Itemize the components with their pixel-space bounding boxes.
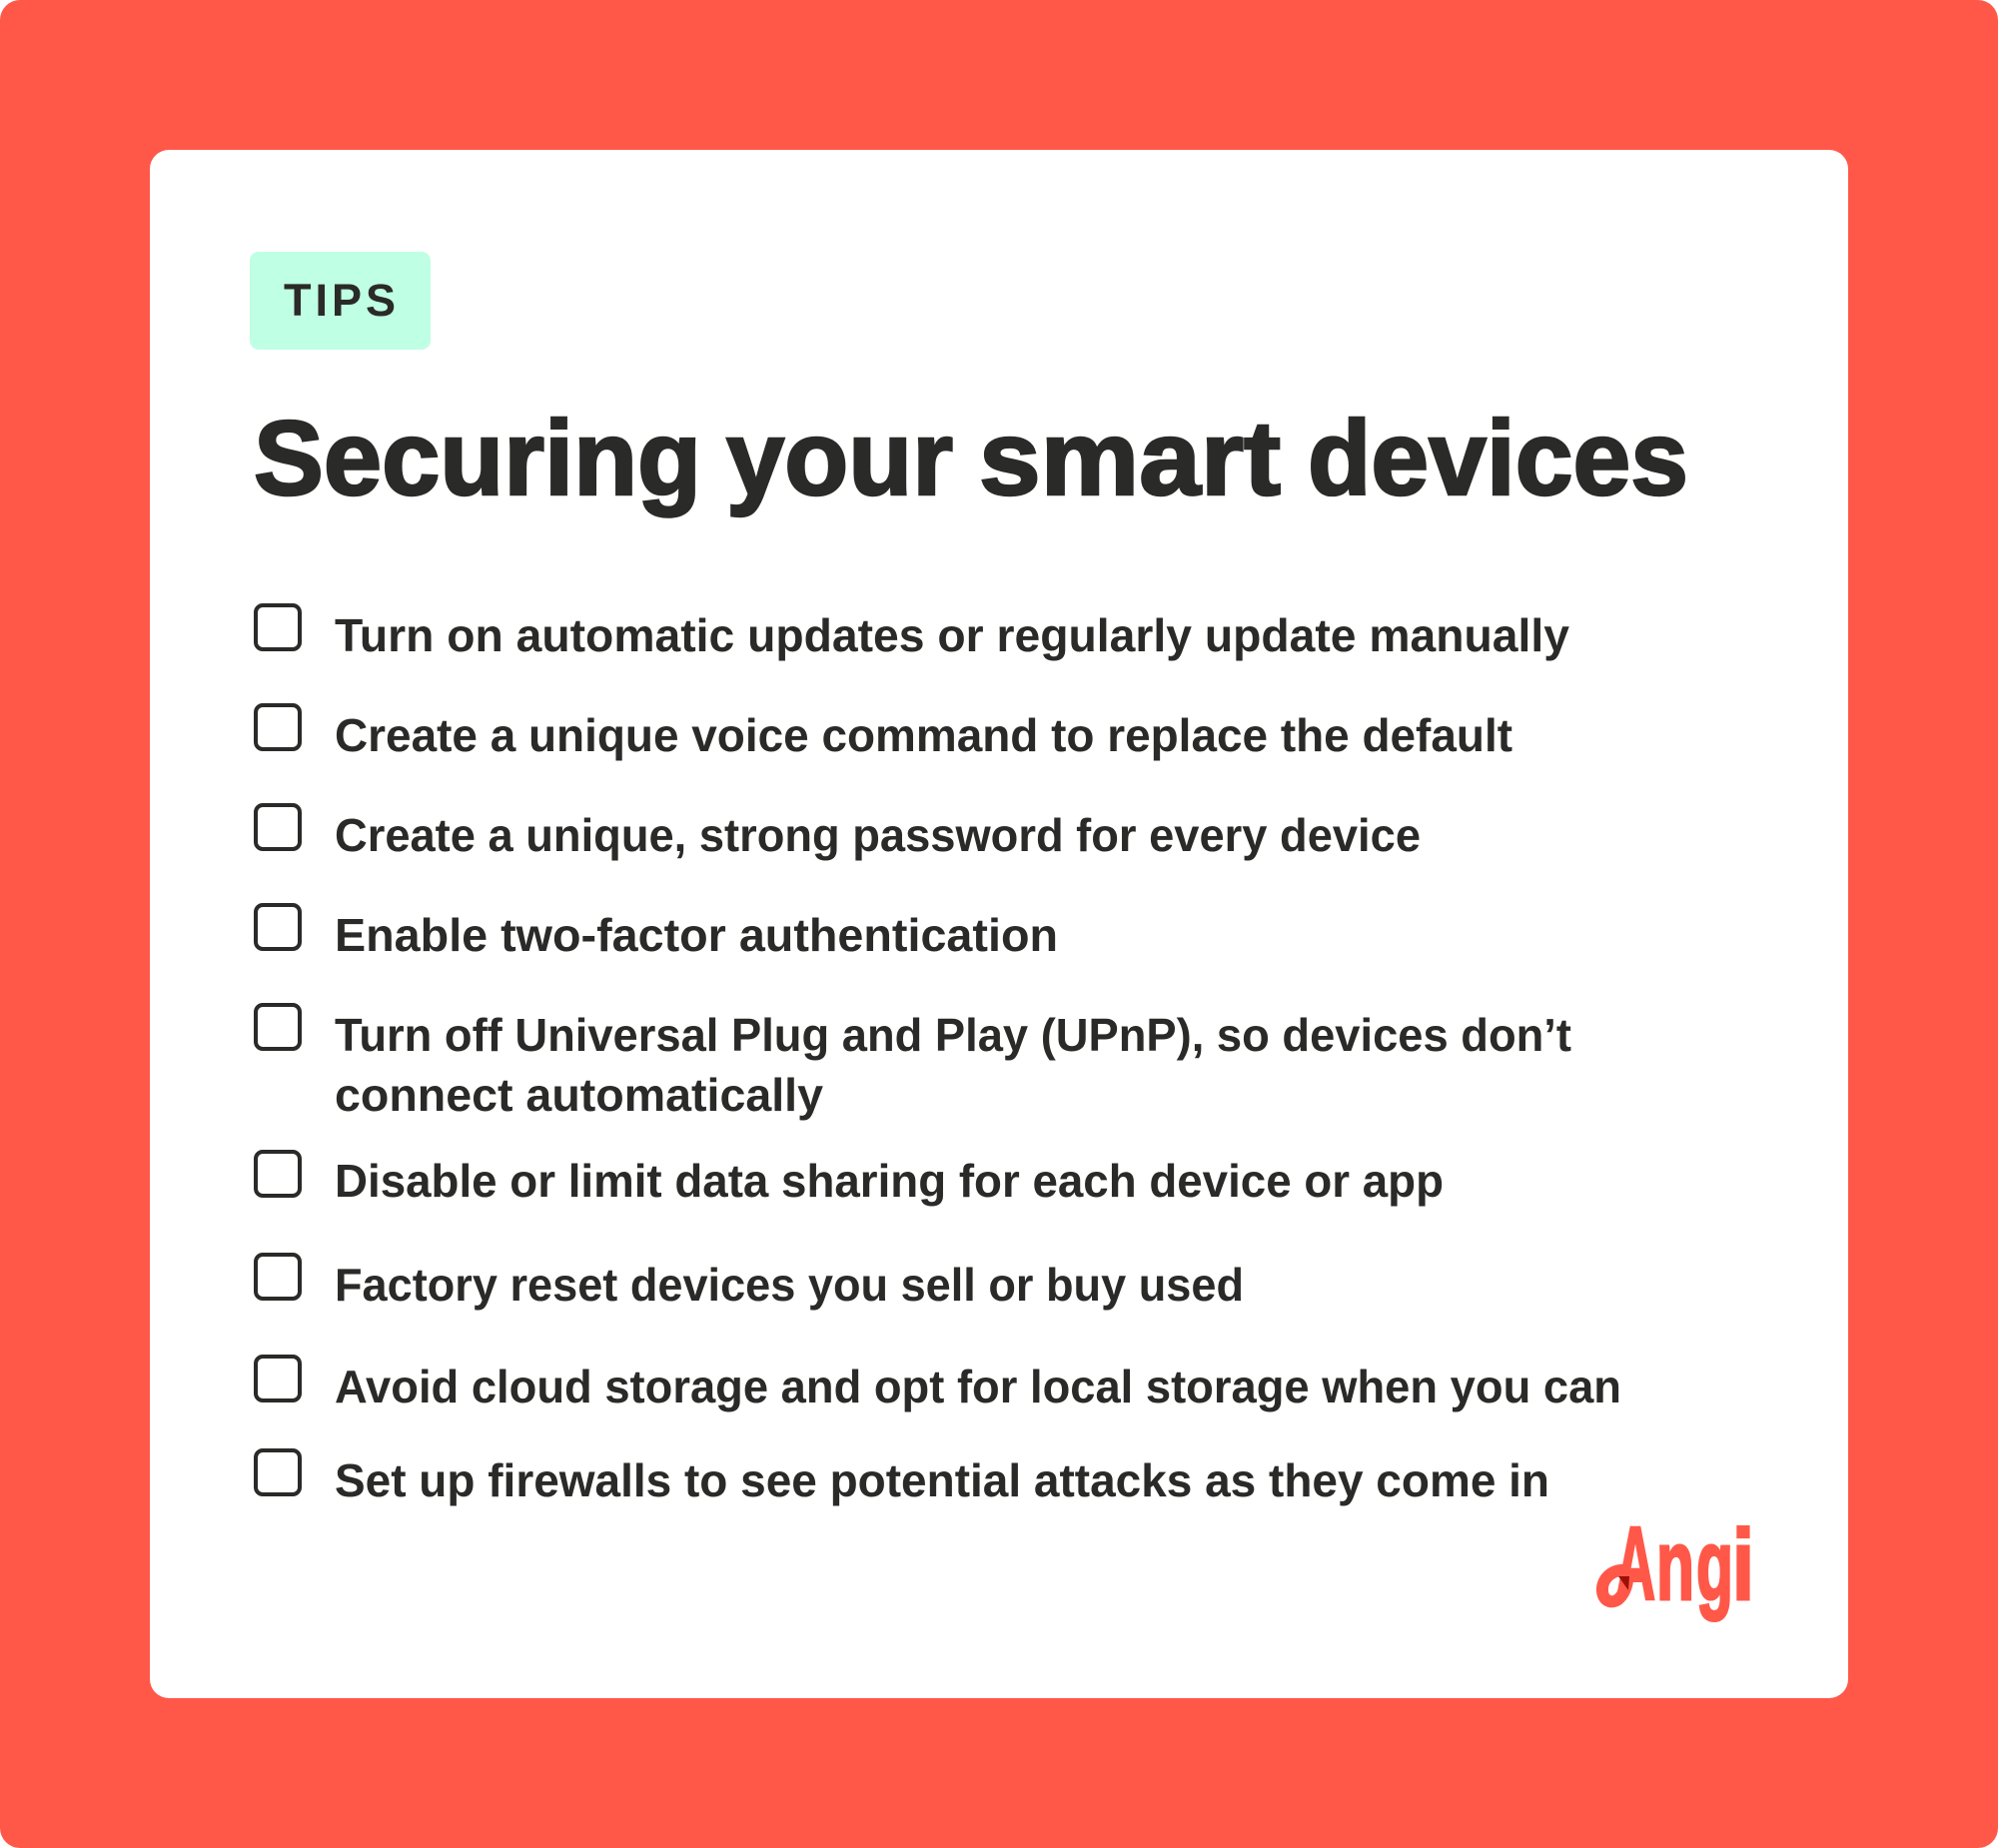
title: Securing bbox=[254, 400, 701, 517]
item 2: Create a unique voice command to replace the default bbox=[335, 709, 1512, 761]
item 6: Disable or limit data sharing for each device or app bbox=[335, 1155, 1444, 1207]
logo: Angi: n bbox=[1656, 1509, 1694, 1621]
title bbox=[254, 400, 1688, 517]
logo: Angi: A bbox=[1615, 1506, 1655, 1622]
title: devices bbox=[1308, 400, 1688, 517]
item 7: Factory reset devices you sell or buy used bbox=[335, 1259, 1244, 1311]
item 5: Turn off Universal Plug and Play (UPnP), so devices don’t bbox=[335, 1009, 1571, 1061]
item 3: Create a unique, strong password for every device bbox=[335, 809, 1421, 861]
item 1: Turn on automatic updates or regularly update manually bbox=[335, 609, 1569, 661]
item 9: Set up firewalls to see potential attacks as they come in bbox=[335, 1454, 1549, 1506]
tag: tips bbox=[250, 252, 431, 350]
logo: Angi bbox=[1602, 1506, 1754, 1622]
item 5 bbox=[256, 1005, 1571, 1121]
panel: white card bbox=[150, 150, 1848, 1698]
item 5: connect automatically bbox=[335, 1069, 823, 1121]
logo: Angi: i bbox=[1732, 1509, 1754, 1621]
item 8: Avoid cloud storage and opt for local storage when you can bbox=[335, 1361, 1621, 1412]
title: smart bbox=[979, 400, 1281, 517]
title: your bbox=[726, 400, 953, 517]
checklist bbox=[256, 605, 1621, 1506]
logo: Angi: g bbox=[1696, 1509, 1733, 1621]
tag: tips: TIPS bbox=[284, 275, 396, 326]
item 4: Enable two-factor authentication bbox=[335, 909, 1058, 961]
